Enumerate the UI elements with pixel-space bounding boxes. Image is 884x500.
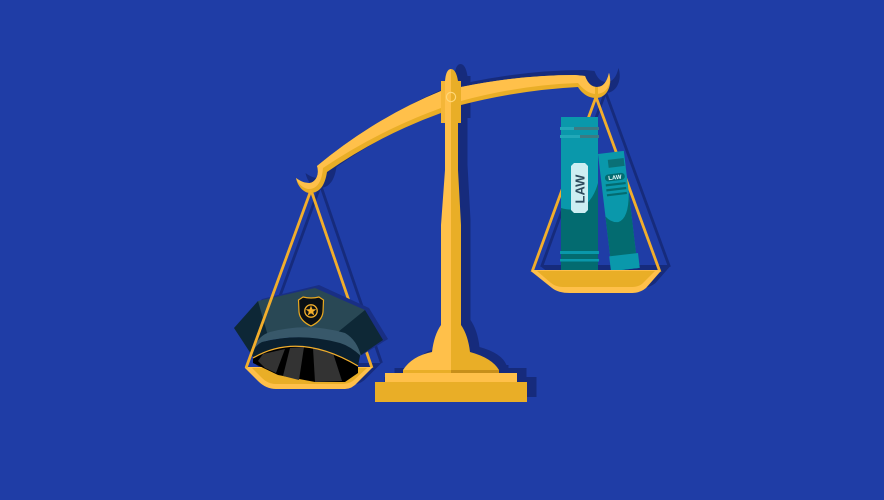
pivot ring — [446, 92, 456, 102]
book bottom ribs — [560, 251, 599, 262]
cap crown — [258, 288, 365, 336]
cap opening — [253, 346, 358, 382]
book label text: LAW — [572, 174, 588, 204]
book lower shade — [561, 183, 598, 271]
leaning book shade — [603, 193, 638, 271]
beam right arm — [461, 73, 610, 105]
leaning law book — [597, 151, 640, 271]
cap band underside — [253, 337, 360, 366]
cap gold trim — [253, 346, 358, 366]
leaning book body — [598, 151, 638, 271]
left pan far string — [311, 190, 372, 368]
book top ribs — [560, 127, 599, 138]
police cap — [234, 285, 388, 382]
large law book — [560, 117, 599, 271]
cap badge — [298, 297, 324, 326]
central column — [375, 69, 527, 402]
right pan — [532, 270, 660, 293]
cap shadow — [238, 285, 388, 360]
beam left arm — [296, 91, 441, 193]
leaning book pill — [605, 173, 625, 182]
cap lining panels — [258, 347, 342, 382]
cap right side — [338, 310, 383, 357]
left pan near string — [246, 190, 311, 368]
cap left side — [234, 301, 275, 357]
leaning book bottom band — [609, 253, 640, 271]
scale shadow — [254, 64, 670, 397]
book spine — [561, 117, 598, 271]
book label — [571, 163, 588, 213]
cap band — [253, 327, 361, 356]
leaning book lines — [606, 182, 627, 196]
left pan — [245, 367, 372, 389]
right pan strings — [532, 97, 660, 272]
leaning book top band — [608, 158, 625, 168]
leaning book label: LAW — [608, 175, 622, 182]
